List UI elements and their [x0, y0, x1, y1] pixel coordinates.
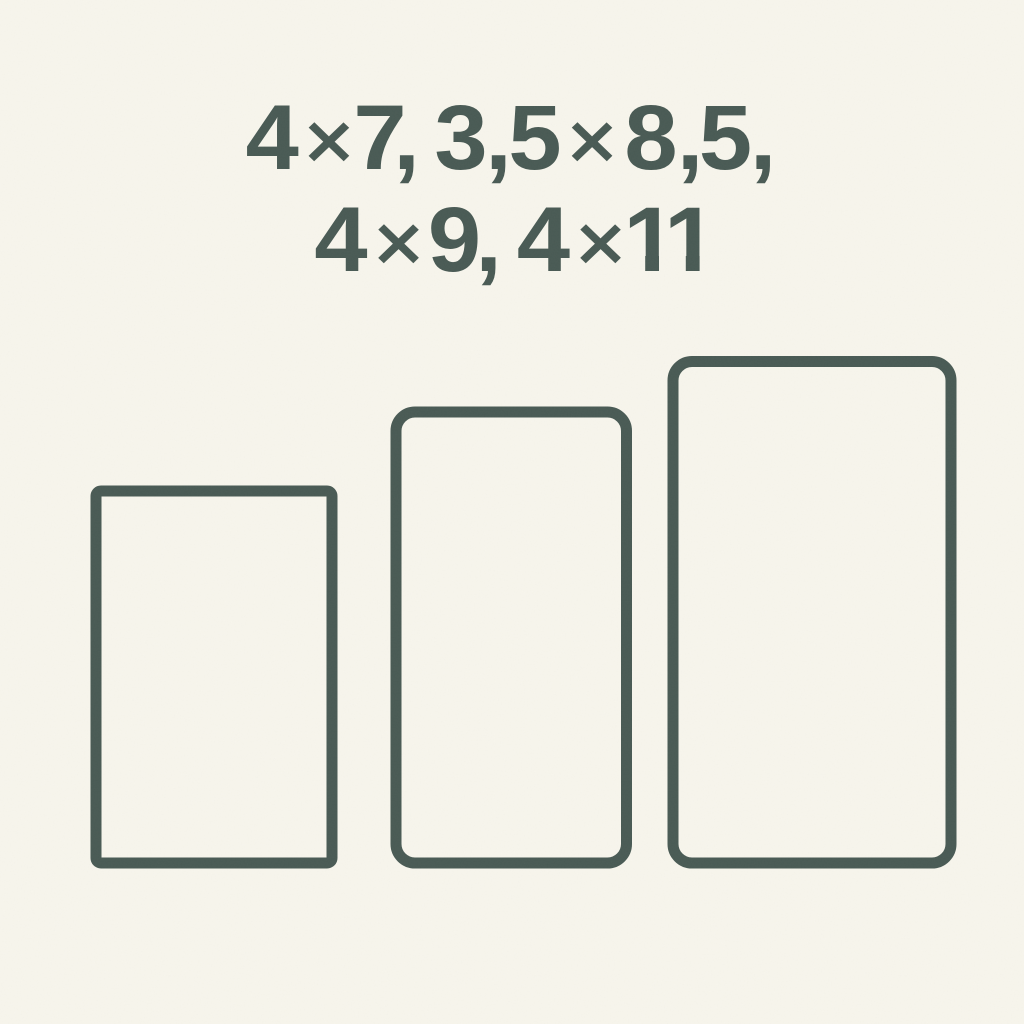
title: ×: [567, 95, 617, 187]
title: ,: [475, 188, 502, 291]
title: 3: [434, 86, 488, 189]
title: ×: [576, 197, 625, 289]
title: 1: [664, 188, 717, 291]
title: ,: [750, 86, 776, 189]
title: 4: [314, 188, 368, 291]
title: ×: [304, 95, 354, 187]
title: 5: [508, 86, 562, 189]
rectangle: small 4×7: [96, 491, 332, 863]
title: ×: [374, 197, 423, 289]
title: ,: [677, 86, 703, 189]
title: ,: [485, 86, 512, 189]
rectangle: large: [673, 362, 951, 863]
title: 4: [246, 86, 299, 189]
title: 5: [699, 86, 752, 189]
rectangle: medium: [396, 412, 626, 863]
title: 8: [624, 86, 678, 189]
title: 1: [623, 188, 677, 291]
title: 7: [353, 86, 407, 189]
title: 4: [517, 188, 570, 291]
title: ,: [393, 86, 420, 189]
title: [246, 86, 776, 291]
title: 9: [428, 188, 481, 291]
